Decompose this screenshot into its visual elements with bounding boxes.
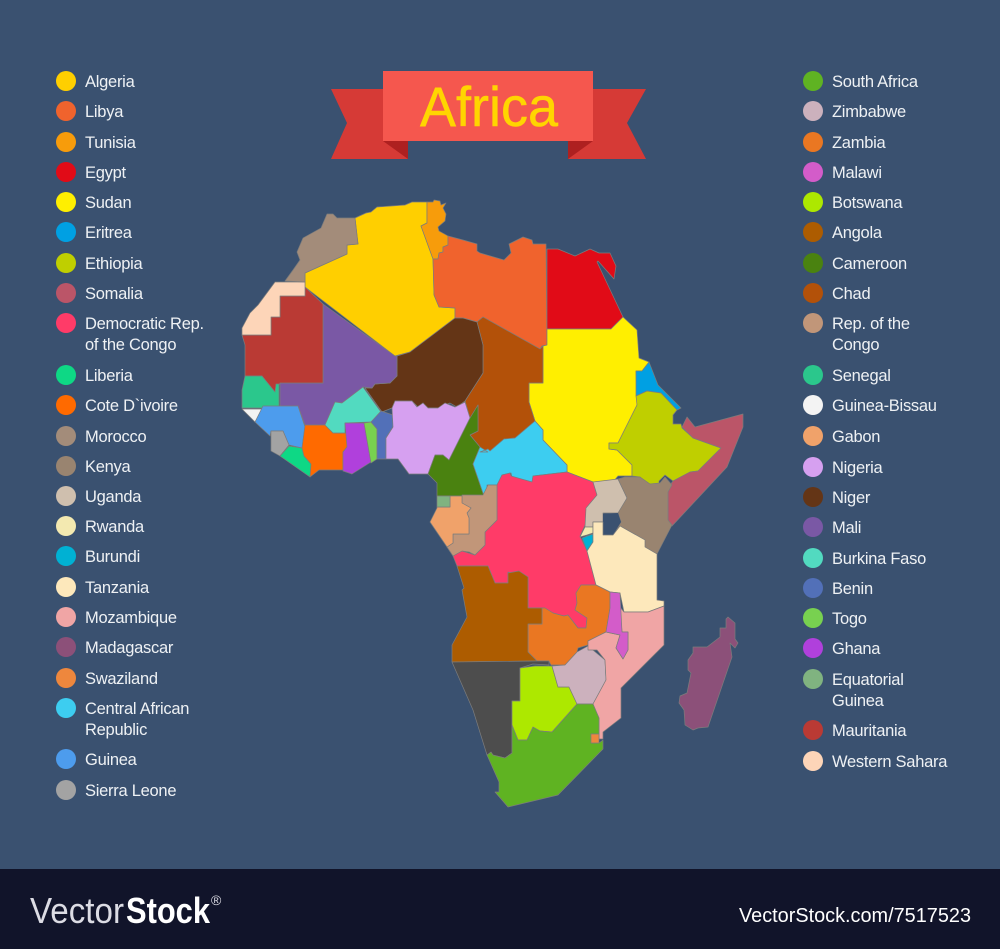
legend item: Algeria <box>56 71 136 91</box>
legend item: Mozambique: Mozambique <box>85 609 177 627</box>
legend item: Guinea: Guinea <box>85 751 138 769</box>
legend item: Senegal: Senegal <box>832 367 891 385</box>
legend item: Cameroon <box>803 253 907 273</box>
legend item: Tanzania: Tanzania <box>85 579 150 597</box>
Mauritania <box>242 287 323 392</box>
legend item: Zambia: Zambia <box>832 134 886 152</box>
legend item: Mauritania <box>803 720 907 740</box>
footer bar <box>0 869 1000 949</box>
legend item: Rep. of the Congo: Congo <box>832 336 879 354</box>
legend item: Chad <box>803 283 870 303</box>
legend item: Mali: Mali <box>832 519 861 537</box>
legend item: Ghana <box>803 638 881 658</box>
legend item: Madagascar <box>56 637 174 657</box>
Tanzania <box>587 522 664 612</box>
legend item: Malawi <box>803 162 882 182</box>
legend item: Botswana: Botswana <box>832 194 903 212</box>
legend item: South Africa: South Africa <box>832 73 919 91</box>
legend item: Libya <box>56 101 124 121</box>
ribbon left fold <box>383 141 408 159</box>
legend item: Algeria: Algeria <box>85 73 136 91</box>
legend item: Burkina Faso: Burkina Faso <box>832 550 926 568</box>
Sudan <box>529 317 649 482</box>
registered mark: ® <box>211 892 222 908</box>
Madagascar <box>679 617 738 730</box>
legend item: Rwanda: Rwanda <box>85 518 145 536</box>
ribbon right tail <box>568 89 646 159</box>
legend item: Botswana <box>803 192 903 212</box>
Eritrea <box>636 362 681 410</box>
legend item: Eritrea <box>56 222 133 242</box>
legend item: Cote D`ivoire <box>56 395 178 415</box>
Rep. of the Congo <box>447 485 497 556</box>
legend item: Tanzania <box>56 577 150 597</box>
Swaziland <box>591 734 599 743</box>
Burkina Faso <box>325 387 381 433</box>
legend item: Somalia <box>56 283 144 303</box>
legend item: Niger: Niger <box>832 489 871 507</box>
Ethiopia <box>609 391 721 484</box>
Democratic Rep. of the Congo <box>453 472 597 628</box>
legend item: Central African Republic: Central African <box>85 700 189 718</box>
Chad <box>465 317 543 452</box>
legend item: Niger <box>803 487 871 507</box>
Egypt <box>547 249 623 329</box>
legend item: Benin <box>803 578 873 598</box>
Ghana <box>343 423 371 474</box>
legend item: Guinea-Bissau: Guinea-Bissau <box>832 397 937 415</box>
legend item: Swaziland: Swaziland <box>85 670 158 688</box>
image id: VectorStock.com/7517523 <box>739 905 971 927</box>
South Africa <box>487 704 603 807</box>
legend item: Chad: Chad <box>832 285 870 303</box>
Cote d'Ivoire <box>302 425 347 477</box>
VectorStock logo: Vector <box>30 890 124 931</box>
Equatorial Guinea <box>437 496 450 507</box>
legend item: Malawi: Malawi <box>832 164 882 182</box>
legend item: Angola: Angola <box>832 224 883 242</box>
Namibia <box>452 661 549 758</box>
legend item: Liberia <box>56 365 134 385</box>
Senegal <box>242 376 279 408</box>
Zambia <box>528 585 610 665</box>
ribbon centre <box>383 71 593 141</box>
legend item: Gabon <box>803 426 880 446</box>
legend item: Rwanda <box>56 516 145 536</box>
Niger <box>365 318 483 412</box>
legend item: Mozambique <box>56 607 177 627</box>
legend item: Burundi: Burundi <box>85 548 140 566</box>
Botswana <box>512 666 577 740</box>
map of Africa <box>242 200 743 807</box>
legend item: Mauritania: Mauritania <box>832 722 907 740</box>
legend item: Ethiopia: Ethiopia <box>85 255 144 273</box>
legend item: Democratic Rep. of the Congo: of the Congo <box>85 336 176 354</box>
legend item: Libya: Libya <box>85 103 124 121</box>
legend item: Burkina Faso <box>803 548 926 568</box>
Mali <box>280 304 397 425</box>
legend item: Swaziland <box>56 668 158 688</box>
Mozambique <box>588 606 664 739</box>
legend item: Tunisia: Tunisia <box>85 134 137 152</box>
legend item: Uganda: Uganda <box>85 488 142 506</box>
legend item: Cameroon: Cameroon <box>832 255 907 273</box>
legend item: Togo <box>803 608 867 628</box>
legend item: Sudan <box>56 192 131 212</box>
legend item: Tunisia <box>56 132 137 152</box>
legend item: Kenya: Kenya <box>85 458 132 476</box>
legend item: Eritrea: Eritrea <box>85 224 133 242</box>
legend item: Liberia: Liberia <box>85 367 134 385</box>
Burundi <box>582 534 593 551</box>
legend item: Benin: Benin <box>832 580 873 598</box>
legend item: Cote D`ivoire: Cote D`ivoire <box>85 397 178 415</box>
title: Africa <box>420 75 559 138</box>
Guinea-Bissau <box>242 409 263 422</box>
legend item: Burundi <box>56 546 140 566</box>
legend item: Egypt <box>56 162 127 182</box>
legend item: Senegal <box>803 365 891 385</box>
legend item: Democratic Rep. of the Congo <box>56 313 204 354</box>
legend item: Central African Republic <box>56 698 189 739</box>
legend item: South Africa <box>803 71 919 91</box>
Liberia <box>280 446 311 477</box>
legend item: Madagascar: Madagascar <box>85 639 174 657</box>
legend item: Angola <box>803 222 883 242</box>
Malawi <box>606 592 628 659</box>
legend item: Ethiopia <box>56 253 144 273</box>
ribbon right fold <box>568 141 593 159</box>
legend item: Zimbabwe <box>803 101 906 121</box>
Guinea <box>255 406 305 448</box>
VectorStock logo: Stock <box>126 890 211 931</box>
Gabon <box>430 496 471 547</box>
Central African Republic <box>473 421 567 496</box>
Zimbabwe <box>552 646 606 704</box>
legend item: Kenya <box>56 456 132 476</box>
legend item: Equatorial Guinea: Equatorial <box>832 671 904 689</box>
Libya <box>433 236 547 349</box>
legend item: Uganda <box>56 486 142 506</box>
legend item: Somalia: Somalia <box>85 285 144 303</box>
ribbon left tail <box>331 89 408 159</box>
legend: right column <box>803 71 948 771</box>
Morocco <box>285 214 358 282</box>
Cameroon <box>428 405 484 496</box>
Rwanda <box>580 527 593 537</box>
Somalia <box>668 414 743 526</box>
legend item: Gabon: Gabon <box>832 428 880 446</box>
legend item: Democratic Rep. of the Congo: Democratic Rep. <box>85 315 204 333</box>
legend item: Sierra Leone: Sierra Leone <box>85 782 176 800</box>
legend item: Mali <box>803 517 861 537</box>
Uganda <box>585 479 627 527</box>
Kenya <box>613 477 672 554</box>
Tunisia <box>421 200 448 259</box>
Angola <box>452 566 542 662</box>
legend: left column <box>56 71 204 800</box>
Benin <box>371 411 393 459</box>
legend item: Zambia <box>803 132 886 152</box>
legend item: Rep. of the Congo: Rep. of the <box>832 315 910 333</box>
legend item: Nigeria <box>803 457 883 477</box>
legend item: Sierra Leone <box>56 780 176 800</box>
legend item: Equatorial Guinea <box>803 669 904 710</box>
legend item: Equatorial Guinea: Guinea <box>832 692 885 710</box>
legend item: Zimbabwe: Zimbabwe <box>832 103 906 121</box>
Nigeria <box>386 401 470 474</box>
legend item: Central African Republic: Republic <box>85 721 147 739</box>
legend item: Ghana: Ghana <box>832 640 881 658</box>
legend item: Morocco: Morocco <box>85 428 146 446</box>
legend item: Guinea <box>56 749 138 769</box>
legend item: Rep. of the Congo <box>803 313 910 354</box>
Western Sahara <box>242 282 305 335</box>
legend item: Sudan: Sudan <box>85 194 131 212</box>
Lake Victoria <box>603 513 621 535</box>
VectorStock logo <box>30 890 211 931</box>
banner: Africa title ribbon <box>331 71 646 159</box>
Algeria <box>305 202 455 356</box>
Sierra Leone <box>271 431 289 456</box>
legend item: Western Sahara: Western Sahara <box>832 753 948 771</box>
legend item: Togo: Togo <box>832 610 867 628</box>
legend item: Egypt: Egypt <box>85 164 127 182</box>
legend item: Morocco <box>56 426 146 446</box>
legend item: Nigeria: Nigeria <box>832 459 883 477</box>
Togo <box>364 422 377 463</box>
